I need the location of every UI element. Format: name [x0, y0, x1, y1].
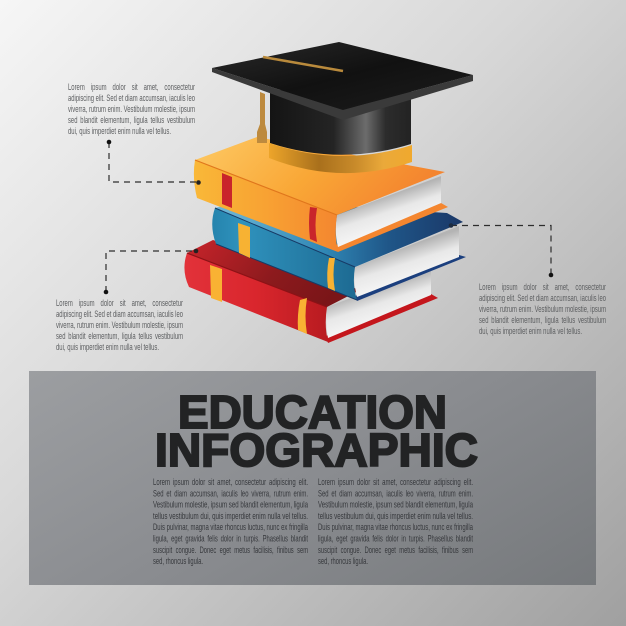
red book spine	[184, 253, 328, 342]
text block: bottom-left callout: Lorem ipsum dolor sit amet, consectetur	[56, 298, 183, 309]
text block: top-left callout: adipiscing elit. Sed et diam accumsan, iaculis leo	[68, 93, 195, 104]
text block: panel column 1: suscipit congue. Donec eget metus facilisis, finibus sem	[153, 545, 308, 556]
connector: bottom-left callout	[104, 249, 198, 294]
text block: panel column 2: Vestibulum molestie, ipsum sed blandit elementum, ligula	[318, 500, 473, 511]
text block: bottom-left callout	[56, 298, 183, 353]
connector: top-left callout	[107, 140, 201, 185]
title	[155, 386, 478, 476]
text block: bottom-left callout: adipiscing elit. Sed et diam accumsan, iaculis leo	[56, 309, 183, 320]
text block: top-left callout: viverra, rutrum enim. Vestibulum molestie, ipsum	[68, 104, 195, 115]
text block: top-left callout	[68, 82, 195, 137]
book: red	[184, 240, 438, 343]
red book bottom cover	[326, 294, 438, 343]
text block: top-left callout: Lorem ipsum dolor sit amet, consectetur	[68, 82, 195, 93]
text block: panel column 2	[318, 477, 473, 567]
cap body	[270, 90, 411, 155]
blue book top cover	[215, 200, 463, 267]
book: orange	[194, 137, 448, 252]
text block: panel column 1: tellus vestibulum dui, quis imperdiet enim nulla vel tellus.	[153, 511, 308, 522]
text block: panel column 2: Lorem ipsum dolor sit amet, consectetur adipiscing elit.	[318, 477, 473, 488]
text block: panel column 2: Duis pulvinar, magna vitae rhoncus luctus, nunc ex fringilla	[318, 522, 473, 533]
text block: panel column 2: Sed et diam accumsan, iaculis leo viverra, rutrum enim.	[318, 488, 473, 499]
text block: panel column 2: suscipit congue. Donec eget metus facilisis, finibus sem	[318, 545, 473, 556]
blue book spine	[212, 208, 357, 300]
connector: right callout	[449, 223, 553, 277]
red book yellow bands	[210, 265, 307, 334]
text block: panel column 1: Lorem ipsum dolor sit amet, consectetur adipiscing elit.	[153, 477, 308, 488]
text block: panel column 2: sed, rhoncus ligula.	[318, 556, 368, 567]
blue book pages	[354, 226, 459, 297]
text block: panel column 2: ligula, eget gravida felis dolor in turpis. Phasellus blandit	[318, 534, 473, 544]
book: blue	[212, 200, 466, 301]
graduation cap	[212, 42, 473, 173]
title line 1: EDUCATION	[178, 386, 447, 438]
text block: top-left callout: sed blandit elementum, ligula tellus vestibulum	[68, 115, 195, 126]
text block: panel column 1: Sed et diam accumsan, iaculis leo viverra, rutrum enim.	[153, 488, 308, 499]
orange book bottom cover	[336, 203, 448, 252]
text block: bottom-left callout: viverra, rutrum enim. Vestibulum molestie, ipsum	[56, 320, 183, 331]
orange book spine	[194, 160, 338, 252]
cap strap	[263, 57, 343, 71]
orange book pages	[336, 176, 441, 247]
text block: top-left callout: dui, quis imperdiet enim nulla vel tellus.	[68, 126, 171, 137]
text block: panel column 2: tellus vestibulum dui, quis imperdiet enim nulla vel tellus.	[318, 511, 473, 522]
blue book bottom cover	[355, 255, 466, 301]
cap gold band	[269, 143, 412, 173]
orange book red bands	[222, 173, 317, 242]
red book pages	[326, 268, 431, 338]
text block: bottom-left callout: dui, quis imperdiet enim nulla vel tellus.	[56, 342, 159, 353]
panel: grey title panel	[29, 371, 596, 585]
text block: panel column 1	[153, 477, 308, 567]
text block: panel column 1: Duis pulvinar, magna vitae rhoncus luctus, nunc ex fringilla	[153, 522, 308, 533]
text block: panel column 1: sed, rhoncus ligula.	[153, 556, 203, 567]
blue book yellow bands	[238, 223, 335, 291]
cap board top	[212, 42, 473, 110]
orange book top cover	[195, 137, 445, 215]
tassel	[257, 92, 267, 143]
text block: bottom-left callout: sed blandit elementum, ligula tellus vestibulum	[56, 331, 183, 342]
title line 2: INFOGRAPHIC	[155, 424, 478, 476]
red book top cover	[187, 240, 360, 307]
text block: right callout	[479, 282, 606, 337]
cap board edge	[212, 68, 473, 120]
text block: panel column 1: Vestibulum molestie, ipsum sed blandit elementum, ligula	[153, 500, 308, 511]
text block: panel column 1: ligula, eget gravida felis dolor in turpis. Phasellus blandit	[153, 534, 308, 544]
